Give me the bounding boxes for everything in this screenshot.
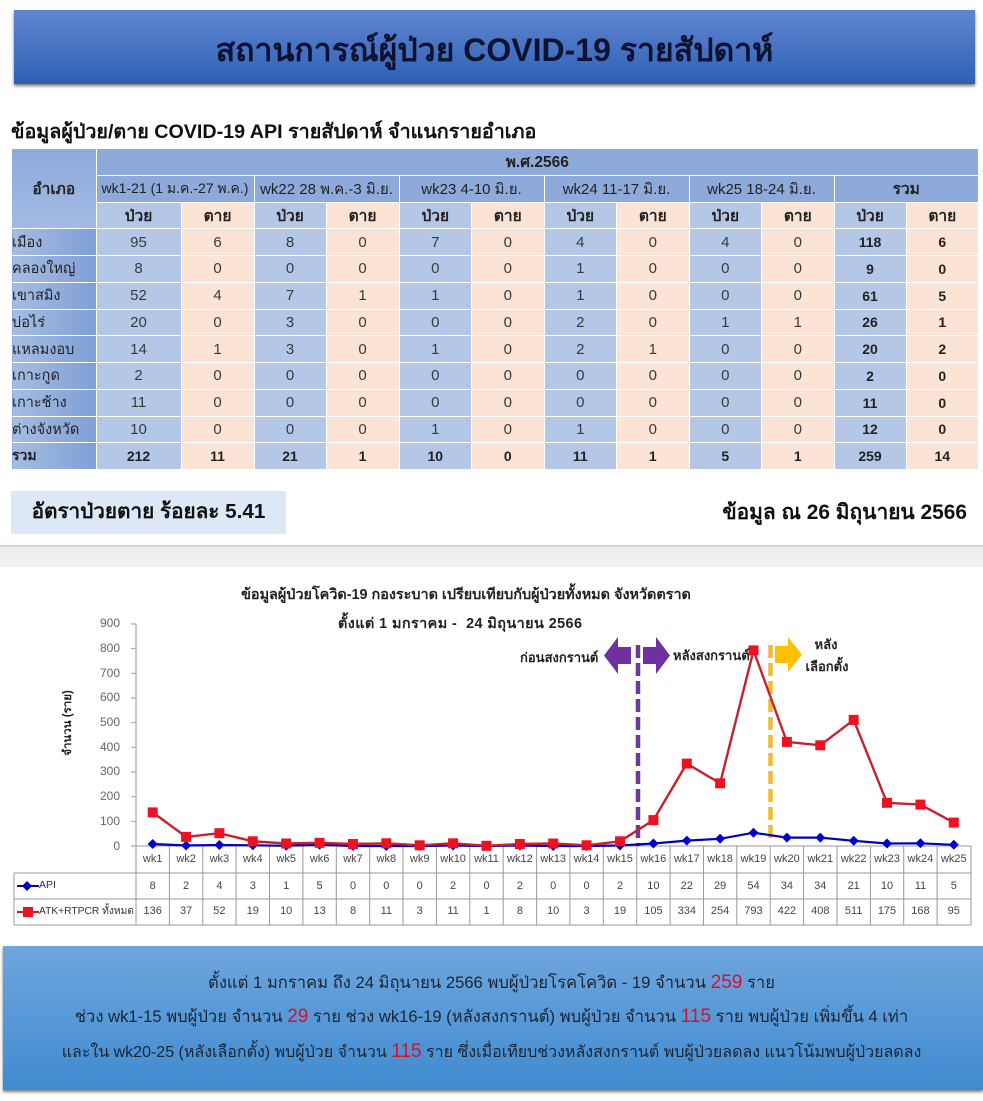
data table: cases and deaths by district: 0	[358, 421, 367, 438]
data table: cases and deaths by district: 95	[130, 234, 147, 251]
week labels: wk3	[209, 853, 229, 865]
data table: cases and deaths by district: 0	[721, 367, 729, 384]
API values	[150, 880, 957, 892]
data table: cases and deaths by district	[12, 149, 978, 469]
data table: cases and deaths by district: ป่วย	[125, 208, 152, 225]
annotation labels: หลัง	[815, 637, 837, 652]
legend: API	[17, 879, 56, 891]
data table: cases and deaths by district: 20	[130, 314, 147, 331]
data table: cases and deaths by district: 1	[431, 341, 439, 358]
y axis: 800	[100, 641, 120, 655]
data table: cases and deaths by district: 0	[721, 341, 729, 358]
data table: cases and deaths by district: 118	[859, 234, 881, 250]
y axis: 900	[100, 616, 120, 630]
data table: cases and deaths by district: อำเภอ	[32, 181, 75, 198]
y axis: 600	[100, 690, 120, 704]
API values: 54	[747, 880, 760, 892]
week labels: wk18	[706, 853, 733, 865]
API values: 10	[647, 880, 660, 892]
data table: cases and deaths by district: 0	[938, 368, 946, 384]
data table: cases and deaths by district: 1	[576, 421, 584, 438]
week labels: wk9	[409, 853, 429, 865]
data table: cases and deaths by district: 0	[358, 234, 367, 251]
data table: cases and deaths by district: 0	[504, 287, 512, 304]
data table: cases and deaths by district: 0	[794, 367, 802, 384]
week labels: wk23	[873, 853, 900, 865]
arrow: after election	[775, 637, 802, 672]
week labels: wk11	[473, 853, 499, 865]
data table: cases and deaths by district: 21	[282, 448, 298, 464]
ATK+RTPCR values: 105	[644, 905, 663, 917]
API values: 21	[848, 880, 860, 892]
y axis: 200	[100, 789, 120, 803]
data table: cases and deaths by district: รวม	[893, 181, 920, 198]
data table: cases and deaths by district: wk24 11-17 มิ.ย.	[563, 181, 670, 198]
API values: 5	[317, 880, 323, 892]
data table: cases and deaths by district: 2	[866, 368, 874, 384]
ATK+RTPCR values: 10	[280, 905, 292, 917]
chart title: ตั้งแต่ 1 มกราคม - 24 มิถุนายน 2566	[338, 612, 582, 632]
week labels: wk6	[309, 853, 329, 865]
ATK+RTPCR values: 254	[711, 905, 729, 917]
week labels: wk25	[940, 853, 967, 865]
data table: cases and deaths by district: 0	[649, 394, 657, 411]
data table: cases and deaths by district: 4	[721, 234, 729, 251]
API values: 34	[781, 880, 793, 892]
data table: cases and deaths by district: 1	[938, 314, 946, 330]
ATK+RTPCR values: 8	[350, 905, 356, 917]
data table: cases and deaths by district: wk22 28 พ.ค.-3 มิ.ย.	[260, 181, 393, 198]
data table: cases and deaths by district: 259	[858, 448, 882, 464]
data table: cases and deaths by district: 5	[721, 448, 729, 464]
data table: cases and deaths by district: 7	[431, 234, 439, 251]
week labels	[142, 853, 967, 865]
API values: 0	[483, 880, 490, 892]
week labels: wk4	[242, 853, 263, 865]
purple dashed line: Songkran	[636, 645, 640, 846]
data table: cases and deaths by district: wk23 4-10 มิ.ย.	[421, 181, 522, 198]
data table: cases and deaths by district: 0	[721, 287, 729, 304]
week labels: wk21	[806, 853, 833, 865]
y axis: 700	[100, 666, 120, 680]
ATK+RTPCR values: 1	[483, 905, 490, 917]
title banner: สถานการณ์ผู้ป่วย COVID-19 รายสัปดาห์	[216, 32, 773, 68]
data table: cases and deaths by district: 1	[576, 287, 584, 304]
week labels: wk19	[740, 853, 766, 865]
API values: 2	[183, 880, 189, 892]
data table: cases and deaths by district: ตาย	[494, 208, 522, 225]
data table: cases and deaths by district: 11	[863, 395, 877, 411]
ATK+RTPCR values: 19	[614, 905, 626, 917]
data table: cases and deaths by district: 0	[794, 341, 802, 358]
data table: cases and deaths by district: 1	[359, 448, 366, 464]
data table: cases and deaths by district: 0	[431, 394, 439, 411]
annotation labels	[520, 637, 848, 674]
data table: cases and deaths by district: ตาย	[639, 208, 667, 225]
week labels: wk12	[506, 853, 533, 865]
data table: cases and deaths by district: 0	[504, 260, 512, 277]
data table: cases and deaths by district: เขาสมิง	[12, 288, 60, 304]
data table: cases and deaths by district: ป่วย	[276, 208, 304, 225]
ATK+RTPCR values: 13	[313, 905, 326, 917]
data table: cases and deaths by district: 20	[862, 341, 878, 357]
ATK+RTPCR values: 334	[678, 905, 696, 917]
data table: cases and deaths by district: 2	[134, 367, 143, 384]
data table: cases and deaths by district: 6	[938, 234, 946, 250]
data table: cases and deaths by district: ป่วย	[566, 208, 594, 225]
data table: cases and deaths by district: 0	[649, 421, 657, 438]
ATK+RTPCR values: 408	[811, 905, 829, 917]
legend: ATK+RTPCR: ATK+RTPCR ทั้งหมด	[39, 902, 134, 917]
API values: 10	[881, 880, 893, 892]
API line	[153, 833, 954, 846]
data table: cases and deaths by district: 52	[130, 287, 147, 304]
ATK+RTPCR values: 3	[417, 905, 423, 917]
data table grid	[14, 846, 971, 925]
data table: cases and deaths by district: 0	[358, 314, 367, 331]
data table: cases and deaths by district: ต่างจังหวัด	[12, 422, 79, 438]
data table: cases and deaths by district: 0	[213, 421, 222, 438]
data table: cases and deaths by district: 0	[576, 394, 584, 411]
summary line 2: ช่วง wk1-15 พบผู้ป่วย จำนวน 29 ราย ช่วง wk16-19 (หลังสงกรานต์) พบผู้ป่วย จำนวน 115 ราย พบผู้ป่วย เพิ่มขึ้น 4 เท่า	[75, 1006, 908, 1027]
data table: cases and deaths by district: 0	[504, 234, 512, 251]
week labels: wk16	[640, 853, 666, 865]
ATK+RTPCR values: 168	[911, 905, 930, 917]
week labels: wk1	[142, 853, 162, 865]
data table: cases and deaths by district: 0	[504, 394, 512, 411]
data table: cases and deaths by district: 1	[649, 341, 657, 358]
y axis	[100, 616, 136, 853]
data table: cases and deaths by district: 61	[862, 288, 878, 304]
line chart with data table	[14, 583, 972, 926]
API values: 0	[383, 880, 389, 892]
data table: cases and deaths by district: เกาะช้าง	[12, 395, 67, 411]
annotation labels: เลือกตั้ง	[806, 656, 848, 674]
yellow dashed line: election	[768, 645, 773, 843]
API values: 8	[150, 880, 156, 892]
data table: cases and deaths by district: 0	[938, 261, 946, 277]
title banner	[14, 10, 975, 84]
week labels: wk7	[342, 853, 363, 865]
legend: API: API	[39, 879, 56, 891]
data table: cases and deaths by district: 0	[286, 260, 294, 277]
data table: cases and deaths by district: 0	[649, 367, 657, 384]
data table: cases and deaths by district: ตาย	[928, 208, 956, 225]
data table: cases and deaths by district: แหลมงอบ	[12, 342, 74, 358]
data table: cases and deaths by district: 0	[213, 367, 222, 384]
data table: cases and deaths by district: 0	[721, 394, 729, 411]
data table: cases and deaths by district: 0	[286, 394, 294, 411]
table heading: ข้อมูลผู้ป่วย/ตาย COVID-19 API รายสัปดาห์ จำแนกรายอำเภอ	[11, 121, 536, 143]
ATK+RTPCR values: 422	[778, 905, 796, 917]
ATK+RTPCR values: 95	[948, 905, 960, 917]
ATK+RTPCR values: 11	[447, 905, 459, 917]
data table: cases and deaths by district: 0	[431, 260, 439, 277]
data table: cases and deaths by district: 0	[938, 421, 946, 437]
data table: cases and deaths by district: 0	[794, 234, 802, 251]
data table: cases and deaths by district: 0	[358, 367, 367, 384]
data table: cases and deaths by district: 0	[504, 421, 512, 438]
data table: cases and deaths by district: ป่วย	[421, 208, 449, 225]
data table: cases and deaths by district: 0	[794, 287, 802, 304]
week labels: wk2	[175, 853, 196, 865]
data table: cases and deaths by district: 0	[721, 421, 729, 438]
API values: 0	[550, 880, 556, 892]
API values: 2	[617, 880, 623, 892]
data table: cases and deaths by district: 212	[127, 448, 150, 464]
week labels: wk5	[275, 853, 296, 865]
data table: cases and deaths by district: 0	[358, 341, 367, 358]
data table: cases and deaths by district: ตาย	[349, 208, 376, 225]
y axis title: จำนวน (ราย)	[60, 690, 74, 756]
data table: cases and deaths by district: 1	[358, 287, 367, 304]
API values: 0	[584, 880, 590, 892]
data table: cases and deaths by district: 0	[794, 260, 802, 277]
data table: cases and deaths by district: 10	[427, 448, 443, 464]
API values: 3	[250, 880, 256, 892]
data table: cases and deaths by district: 11	[131, 394, 146, 411]
annotation labels: ก่อนสงกรานต์	[520, 650, 598, 665]
y axis: 100	[100, 814, 120, 828]
API values: 11	[915, 880, 926, 892]
ATK+RTPCR values: 136	[144, 905, 162, 917]
week labels: wk15	[606, 853, 633, 865]
API values: 2	[450, 880, 456, 892]
data table: cases and deaths by district: wk1-21 (1 ม.ค.-27 พ.ค.)	[102, 180, 248, 196]
ATK+RTPCR values: 11	[381, 905, 392, 917]
API values: 29	[714, 880, 726, 892]
data table: cases and deaths by district: 1	[649, 448, 657, 464]
week labels: wk10	[439, 853, 466, 865]
annotation labels: หลังสงกรานต์	[673, 648, 750, 663]
API values: 0	[350, 880, 356, 892]
data table: cases and deaths by district: 11	[210, 448, 225, 464]
summary line 1: ตั้งแต่ 1 มกราคม ถึง 24 มิถุนายน 2566 พบผู้ป่วยโรคโควิด - 19 จำนวน 259 ราย	[208, 972, 775, 993]
data table: cases and deaths by district: 0	[431, 367, 439, 384]
data table: cases and deaths by district: พ.ศ.2566	[506, 154, 569, 171]
data table: cases and deaths by district: 14	[130, 341, 147, 358]
week labels: wk14	[573, 853, 599, 865]
ATK+RTPCR values: 52	[213, 905, 226, 917]
data table: cases and deaths by district: 1	[794, 448, 802, 464]
data table: cases and deaths by district: 1	[794, 314, 802, 331]
ATK+RTPCR line	[153, 650, 954, 846]
data table: cases and deaths by district: 11	[573, 448, 588, 464]
fatality rate box: อัตราป่วยตาย ร้อยละ 5.41	[32, 500, 265, 523]
data table: cases and deaths by district: รวม	[12, 447, 37, 463]
legend: ATK+RTPCR	[17, 902, 134, 917]
data table: cases and deaths by district: 0	[794, 394, 802, 411]
data table: cases and deaths by district: 0	[938, 395, 946, 411]
y axis: 300	[100, 764, 120, 778]
ATK+RTPCR values: 3	[584, 905, 590, 917]
data table: cases and deaths by district: 2	[576, 314, 584, 331]
API values: 0	[417, 880, 423, 892]
data table: cases and deaths by district: 3	[286, 314, 294, 331]
data table: cases and deaths by district: เกาะกูด	[12, 368, 60, 384]
fatality rate box	[11, 491, 286, 534]
data table: cases and deaths by district: 10	[130, 421, 147, 438]
data table: cases and deaths by district: 0	[794, 421, 802, 438]
ATK+RTPCR values: 37	[180, 905, 192, 917]
data table: cases and deaths by district: 2	[576, 341, 584, 358]
week labels: wk17	[673, 853, 700, 865]
data table: cases and deaths by district: 0	[649, 287, 657, 304]
data table: cases and deaths by district: 5	[938, 288, 946, 304]
API values: 1	[283, 880, 289, 892]
ATK+RTPCR values: 19	[247, 905, 259, 917]
ATK+RTPCR values: 793	[744, 905, 763, 917]
arrow: before Songkran	[604, 637, 631, 674]
data table: cases and deaths by district: 14	[934, 448, 950, 464]
data table: cases and deaths by district: 1	[213, 341, 222, 358]
data table: cases and deaths by district: 26	[862, 314, 878, 330]
data table: cases and deaths by district: คลองใหญ่	[12, 261, 75, 277]
data table: cases and deaths by district: 0	[213, 394, 222, 411]
week labels: wk20	[773, 853, 800, 865]
data table: cases and deaths by district: 0	[576, 367, 584, 384]
data table: cases and deaths by district: ป่วย	[711, 208, 739, 225]
chart title	[241, 583, 691, 632]
API values: 34	[814, 880, 826, 892]
data table: cases and deaths by district: 4	[213, 287, 222, 304]
data table: cases and deaths by district: 2	[938, 341, 946, 357]
week labels: wk24	[907, 853, 933, 865]
ATK+RTPCR values: 8	[517, 905, 523, 917]
chart title: ข้อมูลผู้ป่วยโควิด-19 กองระบาด เปรียบเทียบกับผู้ป่วยทั้งหมด จังหวัดตราด	[241, 583, 691, 603]
data table: cases and deaths by district: 0	[649, 314, 657, 331]
data table: cases and deaths by district: 0	[213, 314, 222, 331]
y axis: 400	[100, 740, 120, 754]
data table: cases and deaths by district: ตาย	[784, 208, 812, 225]
data table: cases and deaths by district: 1	[721, 314, 729, 331]
data table: cases and deaths by district: wk25 18-24 มิ.ย.	[707, 181, 816, 198]
y axis: 500	[100, 715, 120, 729]
data table: cases and deaths by district: บ่อไร่	[12, 315, 45, 331]
week labels: wk22	[840, 853, 867, 865]
data date: ข้อมูล ณ 26 มิถุนายน 2566	[722, 501, 967, 524]
summary panel	[3, 946, 983, 1090]
week labels: wk8	[376, 853, 396, 865]
grey separator band	[0, 545, 983, 567]
ATK+RTPCR values	[144, 905, 960, 917]
data table: cases and deaths by district: 0	[649, 260, 657, 277]
data table: cases and deaths by district: เมือง	[12, 235, 42, 251]
API values: 4	[216, 880, 222, 892]
data table: cases and deaths by district: 8	[134, 260, 143, 277]
ATK+RTPCR values: 175	[878, 905, 896, 917]
data table: cases and deaths by district: 0	[504, 314, 512, 331]
data table: cases and deaths by district: ตาย	[204, 208, 231, 225]
data table: cases and deaths by district: 0	[504, 367, 512, 384]
data table: cases and deaths by district: 0	[721, 260, 729, 277]
data table: cases and deaths by district: 0	[213, 260, 222, 277]
data table: cases and deaths by district: 7	[286, 287, 294, 304]
data table: cases and deaths by district: 1	[431, 287, 439, 304]
y axis: 0	[113, 839, 120, 853]
data table: cases and deaths by district: 0	[504, 448, 512, 464]
data table: cases and deaths by district: 0	[358, 394, 367, 411]
arrow: after Songkran	[643, 637, 670, 674]
API values: 22	[681, 880, 693, 892]
data table: cases and deaths by district: 1	[431, 421, 439, 438]
API values: 5	[951, 880, 957, 892]
ATK+RTPCR values: 10	[547, 905, 559, 917]
week labels: wk13	[539, 853, 566, 865]
ATK+RTPCR values: 511	[845, 905, 862, 917]
data table: cases and deaths by district: 9	[866, 261, 874, 277]
data table: cases and deaths by district: 12	[862, 421, 878, 437]
data table: cases and deaths by district: 0	[286, 367, 294, 384]
API values: 2	[517, 880, 523, 892]
data table: cases and deaths by district: 0	[504, 341, 512, 358]
data table: cases and deaths by district: 3	[286, 341, 294, 358]
data table: cases and deaths by district: 6	[213, 234, 222, 251]
data table: cases and deaths by district: 8	[286, 234, 294, 251]
data table: cases and deaths by district: 0	[286, 421, 294, 438]
summary line 3: และใน wk20-25 (หลังเลือกตั้ง) พบผู้ป่วย จำนวน 115 ราย ซึ่งเมื่อเทียบช่วงหลังสงกรานต์ พบผู้ป่วยลดลง แนวโน้มพบผู้ป่วยลดลง	[62, 1041, 921, 1062]
data table: cases and deaths by district: 4	[576, 234, 584, 251]
data table: cases and deaths by district: ป่วย	[856, 208, 884, 225]
data table: cases and deaths by district: 1	[576, 260, 584, 277]
data table: cases and deaths by district: 0	[431, 314, 439, 331]
data table: cases and deaths by district: 0	[358, 260, 367, 277]
data table: cases and deaths by district: 0	[649, 234, 657, 251]
